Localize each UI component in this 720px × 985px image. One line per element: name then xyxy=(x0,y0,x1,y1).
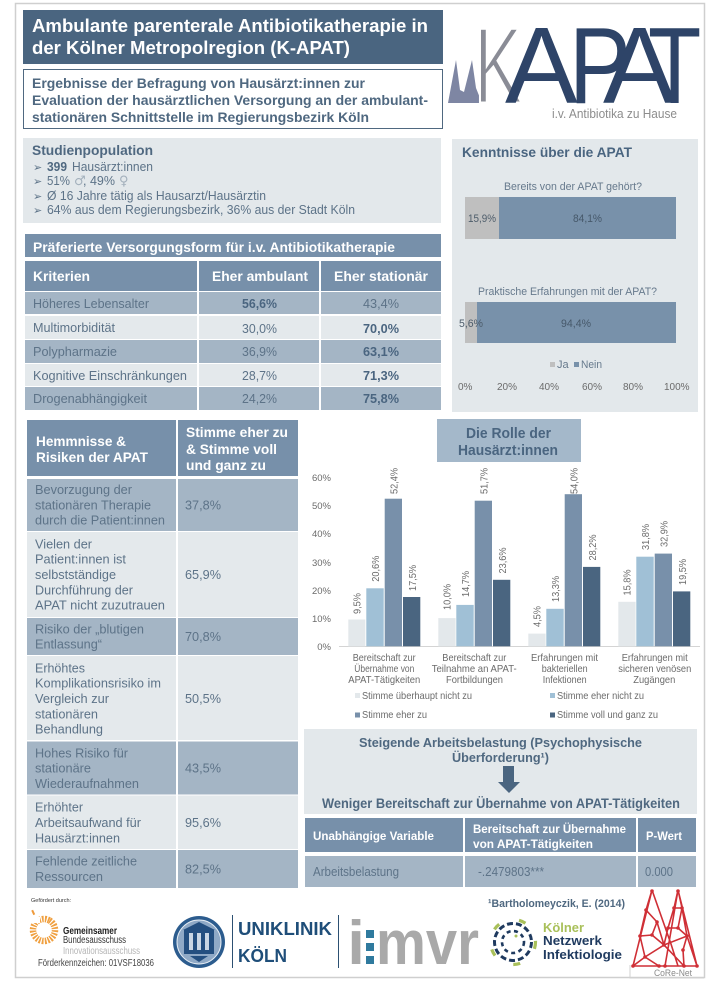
row: Bevorzugung: Bevorzugung der xyxy=(35,482,133,497)
bars: Erfahrungen mit sicheren venösen Zugängen xyxy=(618,521,690,646)
row: Arbeitsaufwand: Erhöhter xyxy=(35,800,84,815)
logo: K-APAT: A xyxy=(505,5,578,127)
bar chart: Praktische Erfahrungen: 94,4% xyxy=(561,318,591,330)
row: Zeitliche Ressourcen xyxy=(27,850,298,888)
panel: Studienpopulation: Ø 16 Jahre tätig als Hausarzt/Hausärztin xyxy=(47,188,266,203)
heading: Kenntnisse: Kenntnisse über die APAT xyxy=(462,144,632,160)
row: Selbstständige Durchführung xyxy=(27,532,298,617)
bar chart: Praktische Erfahrungen: 5,6% xyxy=(459,318,483,330)
logo: K-APAT: i.v. Antibiotika zu Hause xyxy=(552,106,677,121)
row: Arbeitsaufwand: Hausärzt:innen xyxy=(35,830,120,845)
category labels: Übernahme von xyxy=(354,663,414,675)
logo: Universität Siegel xyxy=(173,916,225,968)
axis labels: 20% xyxy=(497,382,517,393)
bars: Erfahrungen mit bakteriellen Infektionen: 13,3% xyxy=(550,576,562,602)
panel: Studienpopulation: 399 xyxy=(47,159,67,174)
bars: Erfahrungen mit bakteriellen Infektionen: 54,0% xyxy=(568,468,580,494)
logo: Kölner Netzwerk Infektiologie: Netzwerk xyxy=(543,934,602,948)
row: Komplikationsrisiko: stationären xyxy=(35,706,98,721)
bars: Bereitschaft zur Teilnahme: 14,7% xyxy=(460,571,472,597)
bar chart: Praktische Erfahrungen xyxy=(459,286,676,343)
table: Regression Arbeitsbelastung: 0.000 xyxy=(645,864,673,879)
logo: K-APAT: P xyxy=(569,5,631,127)
panel: Studienpopulation xyxy=(23,138,441,223)
panel: Studienpopulation: ♂ xyxy=(74,174,86,189)
row: Arbeitsaufwand xyxy=(27,796,298,849)
axis labels: 80% xyxy=(623,382,643,393)
table header: Hemmnisse & xyxy=(36,433,126,449)
row: Selbstständige Durchführung: APAT nicht zuzutrauen xyxy=(35,598,165,613)
logo: K-APAT: T xyxy=(648,5,701,126)
row: Selbstständige Durchführung: Durchführung der xyxy=(35,582,134,597)
row: Drogenabhängigkeit: 24,2% xyxy=(242,391,277,406)
row: Komplikationsrisiko: Behandlung xyxy=(35,722,103,737)
row: Blutige Entlassung: Entlassung“ xyxy=(35,637,102,652)
category labels: Bereitschaft zur xyxy=(353,652,416,664)
row: Höheres Lebensalter xyxy=(25,292,441,314)
row: Polypharmazie xyxy=(25,340,441,363)
legend: Stimme eher zu xyxy=(362,709,427,721)
logo: Gemeinsamer Bundesausschuss: Förderkennzeichen: 01VSF18036 xyxy=(38,958,154,969)
legend: Ja / Nein xyxy=(550,359,602,371)
bar chart: Bereits von der APAT gehört: 84,1% xyxy=(573,213,602,225)
panel: Studienpopulation: ➢ xyxy=(33,204,42,217)
logo: i:mvr: i xyxy=(348,909,365,978)
row: Höheres Lebensalter: Höheres Lebensalter xyxy=(33,296,150,311)
y axis labels xyxy=(312,473,332,653)
row: Zeitliche Ressourcen: 82,5% xyxy=(185,862,221,876)
bars: Erfahrungen mit sicheren venösen Zugängen: 31,8% xyxy=(640,524,652,550)
panel: Studienpopulation: ➢ xyxy=(33,190,42,203)
heading: Präferierte Versorgungsform: Präferierte Versorgungsform für i.v. Antibiotikatherapie xyxy=(33,240,395,255)
row: Bevorzugung: durch die Patient:innen xyxy=(35,513,165,528)
title: der Kölner Metropolregion (K-APAT) xyxy=(32,37,350,58)
panel: Studienpopulation: Hausärzt:innen xyxy=(72,159,153,174)
category labels: Erfahrungen mit xyxy=(531,652,598,664)
logo: K-APAT: K xyxy=(474,4,523,126)
table: Regression Arbeitsbelastung: von APAT-Tätigkeiten xyxy=(473,837,593,851)
row: Kognitive Einschränkungen xyxy=(25,364,441,386)
row: Arbeitsaufwand: Arbeitsaufwand für xyxy=(35,815,142,830)
table header: Risiken der APAT xyxy=(36,449,148,465)
row: Wiederaufnahmen xyxy=(27,742,298,794)
logo: Gemeinsamer Bundesausschuss: Gefördert durch: xyxy=(31,898,72,904)
row: Komplikationsrisiko: Erhöhtes xyxy=(35,660,85,675)
bars: Bereitschaft zur Übernahme: 17,5% xyxy=(407,565,419,591)
table: Regression Arbeitsbelastung: P-Wert xyxy=(646,829,682,843)
arrow: down xyxy=(498,766,520,793)
row: Multimorbidität xyxy=(25,316,441,339)
panel: Kenntnisse über die APAT xyxy=(452,139,698,412)
logo: Uniklinik Köln: KÖLN xyxy=(238,945,287,966)
row: Selbstständige Durchführung: Patient:innen ist xyxy=(35,552,126,567)
row: Selbstständige Durchführung: selbstständige xyxy=(35,567,116,582)
panel: Steigende Arbeitsbelastung: Weniger Bereitschaft zur Übernahme von APAT-Tätigkeiten xyxy=(322,796,680,811)
row: Komplikationsrisiko: Komplikationsrisiko im xyxy=(35,676,161,691)
table: Regression Arbeitsbelastung: -.2479803*** xyxy=(478,864,544,879)
legend: Stimme eher nicht zu xyxy=(557,690,644,702)
bars: Erfahrungen mit bakteriellen Infektionen: 4,5% xyxy=(532,606,544,627)
logo: Kölner Netzwerk Infektiologie xyxy=(490,920,622,964)
panel: Studienpopulation: Studienpopulation xyxy=(32,142,153,158)
bars: Bereitschaft zur Übernahme: 9,5% xyxy=(352,593,364,614)
heading: Die Rolle der Hausärzt:innen: Die Rolle der xyxy=(466,425,551,442)
bars: Bereitschaft zur Teilnahme xyxy=(438,468,510,646)
row: Kognitive Einschränkungen: 28,7% xyxy=(242,368,277,383)
subtitle: Ergebnisse der Befragung von Hausärzt:innen zur xyxy=(32,75,366,91)
table: Regression Arbeitsbelastung xyxy=(305,818,696,887)
category labels: Infektionen xyxy=(543,674,587,686)
logo: Uniklinik Köln: UNIKLINIK xyxy=(238,918,333,939)
bar chart: Die Rolle der Hausärzt:innen xyxy=(312,468,700,721)
y axis labels: 20% xyxy=(312,586,332,597)
row: Zeitliche Ressourcen: Ressourcen xyxy=(35,869,103,884)
bar chart: Bereits von der APAT gehört: Bereits von der APAT gehört? xyxy=(504,181,642,193)
legend xyxy=(355,690,658,721)
bars: Bereitschaft zur Teilnahme: 51,7% xyxy=(478,468,490,494)
logo: Kölner Netzwerk Infektiologie: Infektiologie xyxy=(543,948,622,962)
row: Höheres Lebensalter: 56,6% xyxy=(242,296,277,311)
axis labels xyxy=(458,382,690,393)
row: Multimorbidität: 30,0% xyxy=(242,321,277,336)
row: Arbeitsaufwand: 95,6% xyxy=(185,815,221,830)
row: Drogenabhängigkeit: 75,8% xyxy=(363,391,399,406)
row: Blutige Entlassung xyxy=(27,618,298,655)
bars: Erfahrungen mit sicheren venösen Zugängen: 32,9% xyxy=(658,521,670,547)
subtitle: stationären Schnittstelle im Regierungsbezirk Köln xyxy=(32,109,369,125)
row: Wiederaufnahmen: stationäre xyxy=(35,761,91,776)
row: Multimorbidität: 70,0% xyxy=(363,321,399,336)
category labels: Zugängen xyxy=(633,674,675,686)
table header: Stimme eher zu xyxy=(186,424,288,440)
row: Multimorbidität: Multimorbidität xyxy=(33,320,115,335)
logo: K-APAT xyxy=(448,4,701,127)
title xyxy=(23,10,443,64)
table header: & Stimme voll xyxy=(186,441,277,457)
row: Drogenabhängigkeit: Drogenabhängigkeit xyxy=(33,391,147,406)
table: Regression Arbeitsbelastung: Unabhängige Variable xyxy=(313,829,434,843)
logo: CoRe-Net xyxy=(630,889,704,978)
bars: Bereitschaft zur Teilnahme: 23,6% xyxy=(497,548,509,574)
bars: Erfahrungen mit bakteriellen Infektionen xyxy=(528,468,600,646)
table header xyxy=(27,420,298,476)
category labels: Teilnahme an APAT- xyxy=(432,663,517,675)
row: Polypharmazie: 63,1% xyxy=(363,344,399,359)
row: Komplikationsrisiko xyxy=(27,656,298,740)
heading: Die Rolle der Hausärzt:innen xyxy=(437,419,581,462)
bars: Bereitschaft zur Übernahme: 52,4% xyxy=(388,468,400,494)
row: Höheres Lebensalter: 43,4% xyxy=(363,296,399,311)
bar chart: Praktische Erfahrungen: Praktische Erfahrungen mit der APAT? xyxy=(478,286,657,298)
category labels: Fortbildungen xyxy=(446,674,503,686)
legend: Ja / Nein: Nein xyxy=(581,359,602,371)
panel: Studienpopulation: 64% aus dem Regierungsbezirk, 36% aus der Stadt Köln xyxy=(47,202,355,217)
axis labels: 60% xyxy=(582,382,602,393)
row: Bevorzugung: 37,8% xyxy=(185,498,221,512)
row: Wiederaufnahmen: 43,5% xyxy=(185,760,221,776)
table header xyxy=(25,261,441,291)
table header: Eher ambulant xyxy=(212,268,308,284)
table: Regression Arbeitsbelastung: Bereitschaft zur Übernahme xyxy=(473,821,626,836)
table: Regression Arbeitsbelastung: Arbeitsbelastung xyxy=(313,864,399,879)
bar chart: Bereits von der APAT gehört xyxy=(465,181,676,239)
row: Wiederaufnahmen: Wiederaufnahmen xyxy=(35,776,139,791)
y axis labels: 60% xyxy=(312,473,332,484)
row: Bevorzugung: stationären Therapie xyxy=(35,497,151,512)
logo: Kölner Netzwerk Infektiologie: Kölner xyxy=(543,921,584,935)
panel: Studienpopulation: , 49% xyxy=(83,173,115,188)
category labels xyxy=(348,652,691,686)
logo: Gemeinsamer Bundesausschuss xyxy=(29,898,154,969)
bar chart: Bereits von der APAT gehört: 15,9% xyxy=(468,213,496,225)
axis labels: 40% xyxy=(539,382,559,393)
y axis labels: 40% xyxy=(312,529,332,540)
row: Komplikationsrisiko: 50,5% xyxy=(185,691,221,706)
logo: Gemeinsamer Bundesausschuss: Innovationsausschuss xyxy=(63,946,140,957)
bars: Erfahrungen mit sicheren venösen Zugängen: 19,5% xyxy=(677,559,689,585)
row: Wiederaufnahmen: Hohes Risiko für xyxy=(35,745,129,760)
row: Drogenabhängigkeit xyxy=(25,387,441,410)
table: Präferierte Versorgungsform xyxy=(25,234,441,410)
panel: Steigende Arbeitsbelastung: Überforderung¹) xyxy=(452,750,549,765)
row: Blutige Entlassung: Risiko der „blutigen xyxy=(35,621,144,636)
panel: Studienpopulation: ➢ xyxy=(33,161,42,174)
heading: Präferierte Versorgungsform xyxy=(25,234,441,257)
logo: CoRe-Net: CoRe-Net xyxy=(654,968,692,978)
footnote: Bartholomeyczik: ¹Bartholomeyczik, E. (2014) xyxy=(488,898,625,910)
bars: Bereitschaft zur Teilnahme: 10,0% xyxy=(442,584,454,610)
subtitle: Evaluation der hausärztlichen Versorgung an der ambulant- xyxy=(32,92,428,108)
row: Kognitive Einschränkungen: Kognitive Einschränkungen xyxy=(33,368,187,383)
bars: Bereitschaft zur Übernahme xyxy=(348,468,420,646)
logo: Gemeinsamer Bundesausschuss: Gemeinsamer xyxy=(63,926,117,937)
y axis labels: 50% xyxy=(312,501,332,512)
category labels: Bereitschaft zur xyxy=(442,652,507,664)
logo: i:mvr: mvr xyxy=(376,909,479,978)
bars: Erfahrungen mit bakteriellen Infektionen: 28,2% xyxy=(587,534,599,560)
title: Ambulante parenterale Antibiotikatherapie in xyxy=(32,15,428,36)
row: Bevorzugung xyxy=(27,479,298,531)
logo: K-APAT: A xyxy=(603,5,676,127)
y axis labels: 0% xyxy=(317,642,332,653)
y axis labels: 30% xyxy=(312,558,332,569)
row: Selbstständige Durchführung: 65,9% xyxy=(185,567,221,582)
panel: Steigende Arbeitsbelastung xyxy=(304,729,697,814)
subtitle xyxy=(24,70,442,128)
panel: Studienpopulation: 51% xyxy=(47,173,70,188)
table header: Eher stationär xyxy=(334,268,429,284)
bars: Erfahrungen mit sicheren venösen Zugängen: 15,8% xyxy=(622,570,634,596)
axis labels: 0% xyxy=(458,382,473,393)
category labels: bakteriellen xyxy=(542,663,588,675)
row: Zeitliche Ressourcen: Fehlende zeitliche xyxy=(35,854,137,869)
logo: Gemeinsamer Bundesausschuss: Bundesausschuss xyxy=(63,935,126,946)
logo: Uniklinik Köln xyxy=(232,915,339,968)
bars: Bereitschaft zur Übernahme: 20,6% xyxy=(370,556,382,582)
row: Kognitive Einschränkungen: 71,3% xyxy=(363,368,399,383)
panel: Studienpopulation: ➢ xyxy=(33,175,42,188)
category labels: Erfahrungen mit xyxy=(622,652,688,664)
row: Polypharmazie: Polypharmazie xyxy=(33,344,117,359)
legend: Stimme überhaupt nicht zu xyxy=(362,690,472,702)
category labels: APAT-Tätigkeiten xyxy=(348,674,420,686)
category labels: sicheren venösen xyxy=(618,663,691,675)
table header: Kriterien xyxy=(33,268,90,284)
row: Komplikationsrisiko: Vergleich zur xyxy=(35,691,110,706)
legend: Ja / Nein: Ja xyxy=(557,359,570,371)
axis labels: 100% xyxy=(664,382,690,393)
row: Selbstständige Durchführung: Vielen der xyxy=(35,536,93,551)
heading: Die Rolle der Hausärzt:innen: Hausärzt:innen xyxy=(458,442,558,459)
row: Blutige Entlassung: 70,8% xyxy=(185,629,221,644)
panel: Studienpopulation: ♀ xyxy=(119,174,129,189)
panel: Steigende Arbeitsbelastung: Steigende Arbeitsbelastung (Psychophysische xyxy=(359,735,642,750)
table: Hemmnisse und Risiken der APAT xyxy=(27,420,298,888)
legend: Stimme voll und ganz zu xyxy=(557,709,658,721)
y axis labels: 10% xyxy=(312,614,332,625)
row: Polypharmazie: 36,9% xyxy=(242,344,277,359)
table header: und ganz zu xyxy=(186,457,266,473)
